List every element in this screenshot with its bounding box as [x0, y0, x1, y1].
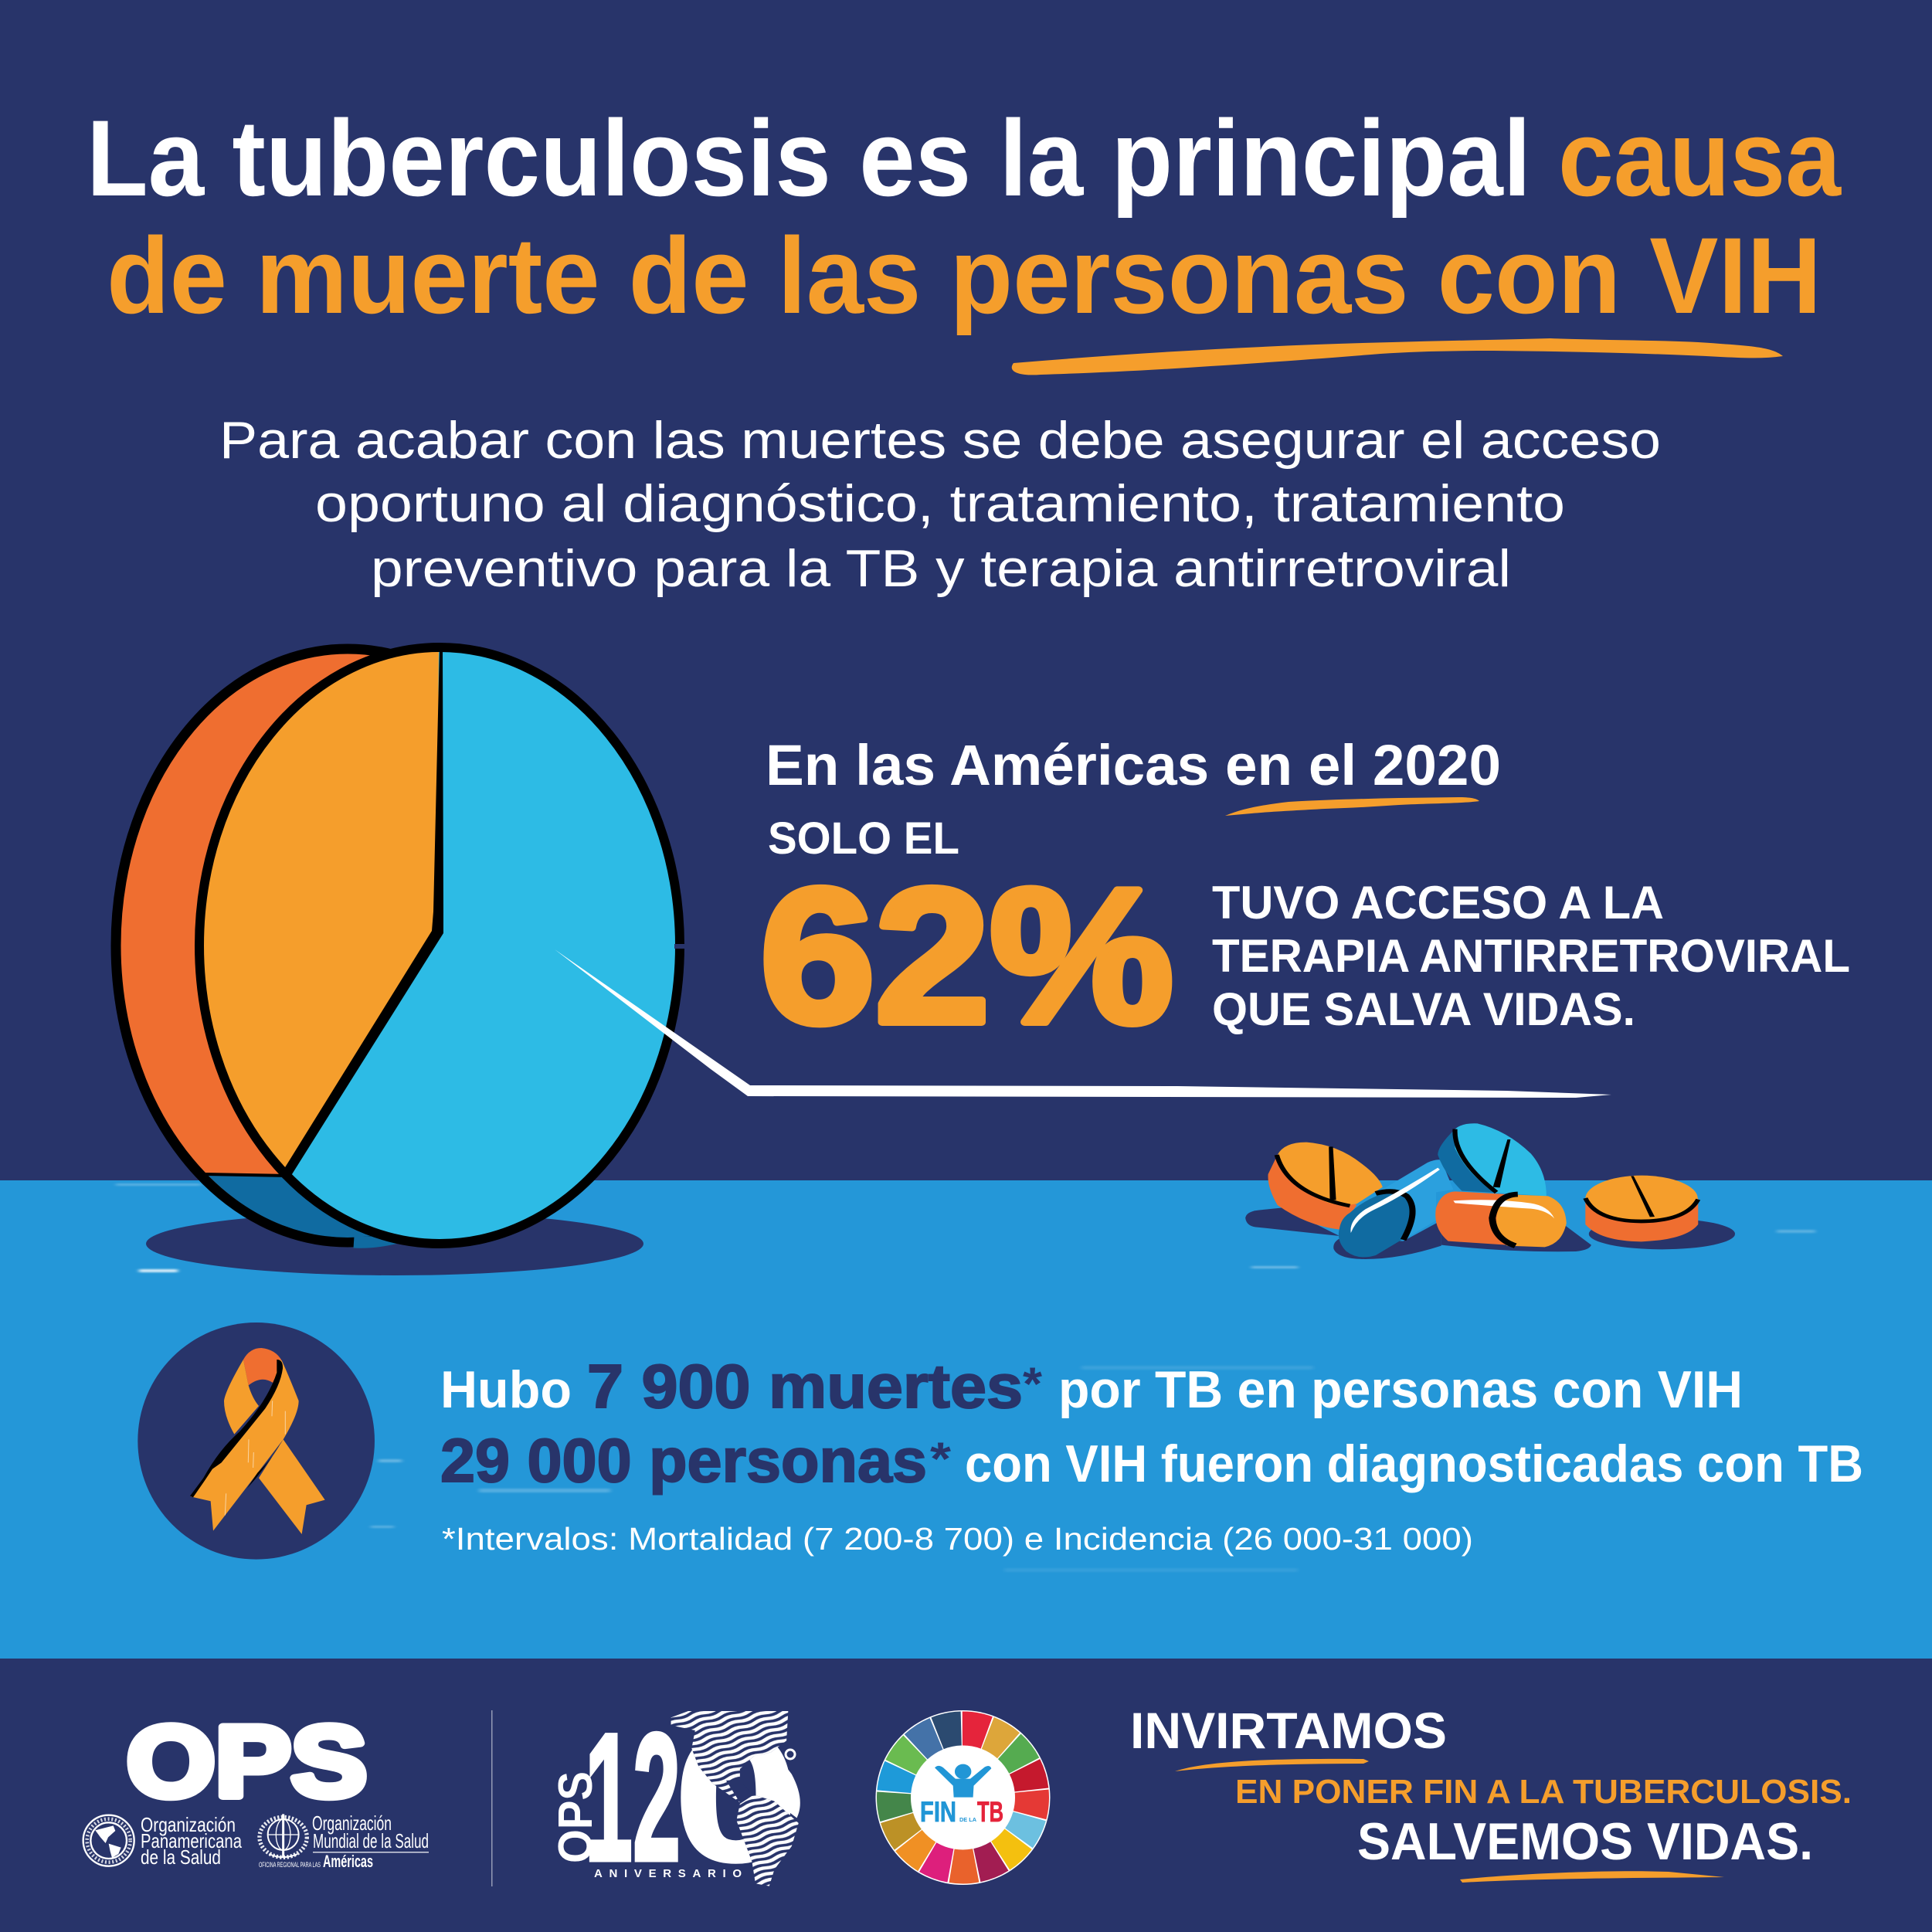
logo: OPS 120 aniversario: OPS [549, 1771, 603, 1863]
logo: FIN de la TB wheel: TB [977, 1796, 1003, 1828]
pill shadows [1245, 1207, 1735, 1259]
floor band [0, 1180, 1932, 1659]
icon: pills [1245, 1123, 1735, 1259]
logo: OPS [83, 1705, 429, 1871]
statistics text: Hubo [440, 1360, 572, 1419]
big number 62%: 62% [760, 848, 1173, 1063]
logo: OPS: Américas [323, 1852, 373, 1871]
figure with raised arms [935, 1764, 991, 1798]
title: de muerte de las personas con VIH [107, 215, 1822, 336]
logo: FIN de la TB wheel: DE LA [959, 1818, 976, 1823]
logo: FIN de la TB wheel: FIN [920, 1796, 956, 1828]
statistics text [440, 1352, 1863, 1495]
statement text [1212, 877, 1850, 1035]
statement text: QUE SALVA VIDAS. [1212, 983, 1635, 1035]
subtitle paragraph: oportuno al diagnóstico, tratamiento, tratamiento [315, 474, 1565, 533]
text: SOLO EL: SOLO EL [768, 813, 959, 864]
statistics text: por TB en personas con VIH [1058, 1360, 1743, 1419]
subtitle paragraph: Para acabar con las muertes se debe asegurar el acceso [219, 411, 1661, 470]
title underline brush stroke [1012, 338, 1783, 375]
footer slogan: EN PONER FIN A LA TUBERCULOSIS. [1235, 1773, 1852, 1811]
footer divider [491, 1710, 493, 1886]
logo: OPS: OFICINA REGIONAL PARA LAS [259, 1861, 321, 1869]
icon: awareness ribbon [138, 1323, 375, 1560]
left orange pill [1268, 1143, 1383, 1230]
heading: En las Américas en el 2020: En las Américas en el 2020 [766, 733, 1501, 797]
logo: OPS: Mundial de la Salud [313, 1829, 429, 1852]
emblem: WHO [260, 1814, 307, 1857]
callout pointer line [555, 949, 1611, 1098]
footer slogan [1130, 1702, 1852, 1883]
pie chart 62 percent [116, 647, 685, 1275]
logo: OPS 120 aniversario: ANIVERSARIO [594, 1867, 742, 1880]
blue pill [1438, 1123, 1547, 1196]
logo: OPS: Panamericana [141, 1829, 242, 1852]
footer slogan: SALVEMOS VIDAS. [1357, 1812, 1813, 1871]
subtitle paragraph: preventivo para la TB y terapia antirretroviral [371, 539, 1511, 598]
logo: OPS: OPS [127, 1705, 367, 1818]
title: La tuberculosis es la principal [87, 97, 1531, 219]
right orange pill [1585, 1176, 1698, 1241]
statistics text: 7 900 muertes [587, 1352, 1023, 1421]
logo: FIN de la TB wheel [876, 1710, 1051, 1885]
heading underline [1225, 797, 1479, 816]
logo: OPS: de la Salud [141, 1845, 221, 1869]
striped map of the Americas [671, 1711, 800, 1886]
logo: OPS: Organización [141, 1813, 236, 1836]
logo: OPS 120 aniversario: 0 [674, 1696, 798, 1900]
footer slogan: INVIRTAMOS [1130, 1702, 1447, 1759]
footnote: *Intervalos: Mortalidad (7 200-8 700) e Incidencia (26 000-31 000) [442, 1521, 1473, 1557]
statement text: TERAPIA ANTIRRETROVIRAL [1212, 930, 1850, 982]
statistics text: * [930, 1433, 952, 1485]
emblem: PAHO [83, 1815, 134, 1866]
footer band [0, 1659, 1932, 1932]
logo: OPS 120 aniversario: 12 [585, 1696, 681, 1900]
title [87, 97, 1842, 336]
statistics text: con VIH fueron diagnosticadas con TB [965, 1435, 1863, 1493]
blue capsule [1339, 1160, 1453, 1257]
orange capsule [1435, 1191, 1567, 1247]
logo: OPS: Organización [312, 1811, 392, 1835]
statistics text: * [1023, 1358, 1043, 1410]
title: causa [1558, 97, 1842, 219]
statistics text: 29 000 personas [440, 1426, 927, 1495]
statement text: TUVO ACCESO A LA [1212, 877, 1664, 929]
subtitle paragraph [219, 411, 1661, 598]
